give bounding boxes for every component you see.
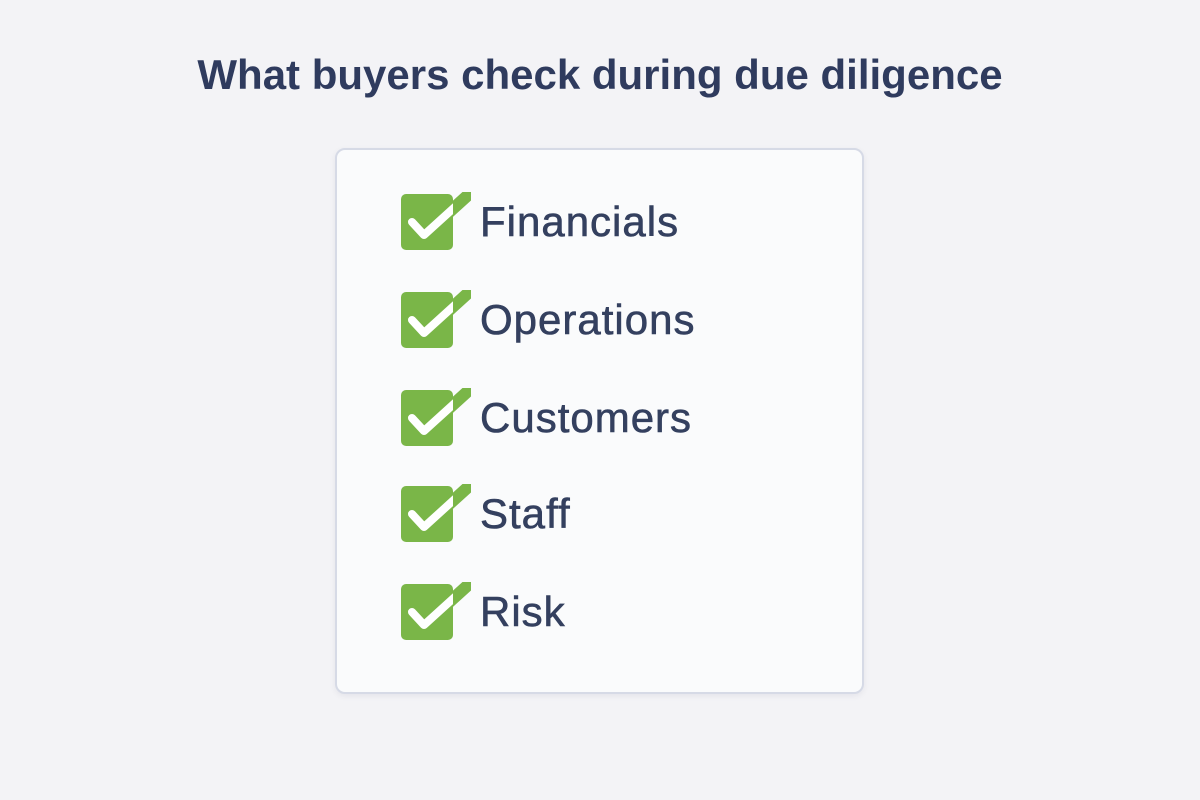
item: Risk [401,582,566,640]
item: Staff [401,484,571,542]
item: Operations: Operations [480,296,695,343]
panel: checklist [335,148,864,694]
item: Customers [401,388,692,446]
item: Customers: Customers [480,394,692,441]
item: Staff: Staff [480,490,571,537]
item: Financials [401,192,679,250]
item: Risk: Risk [480,588,566,635]
title: What buyers check during due diligence [197,51,1003,98]
item: Financials: Financials [480,198,679,245]
item: Operations [401,290,695,348]
